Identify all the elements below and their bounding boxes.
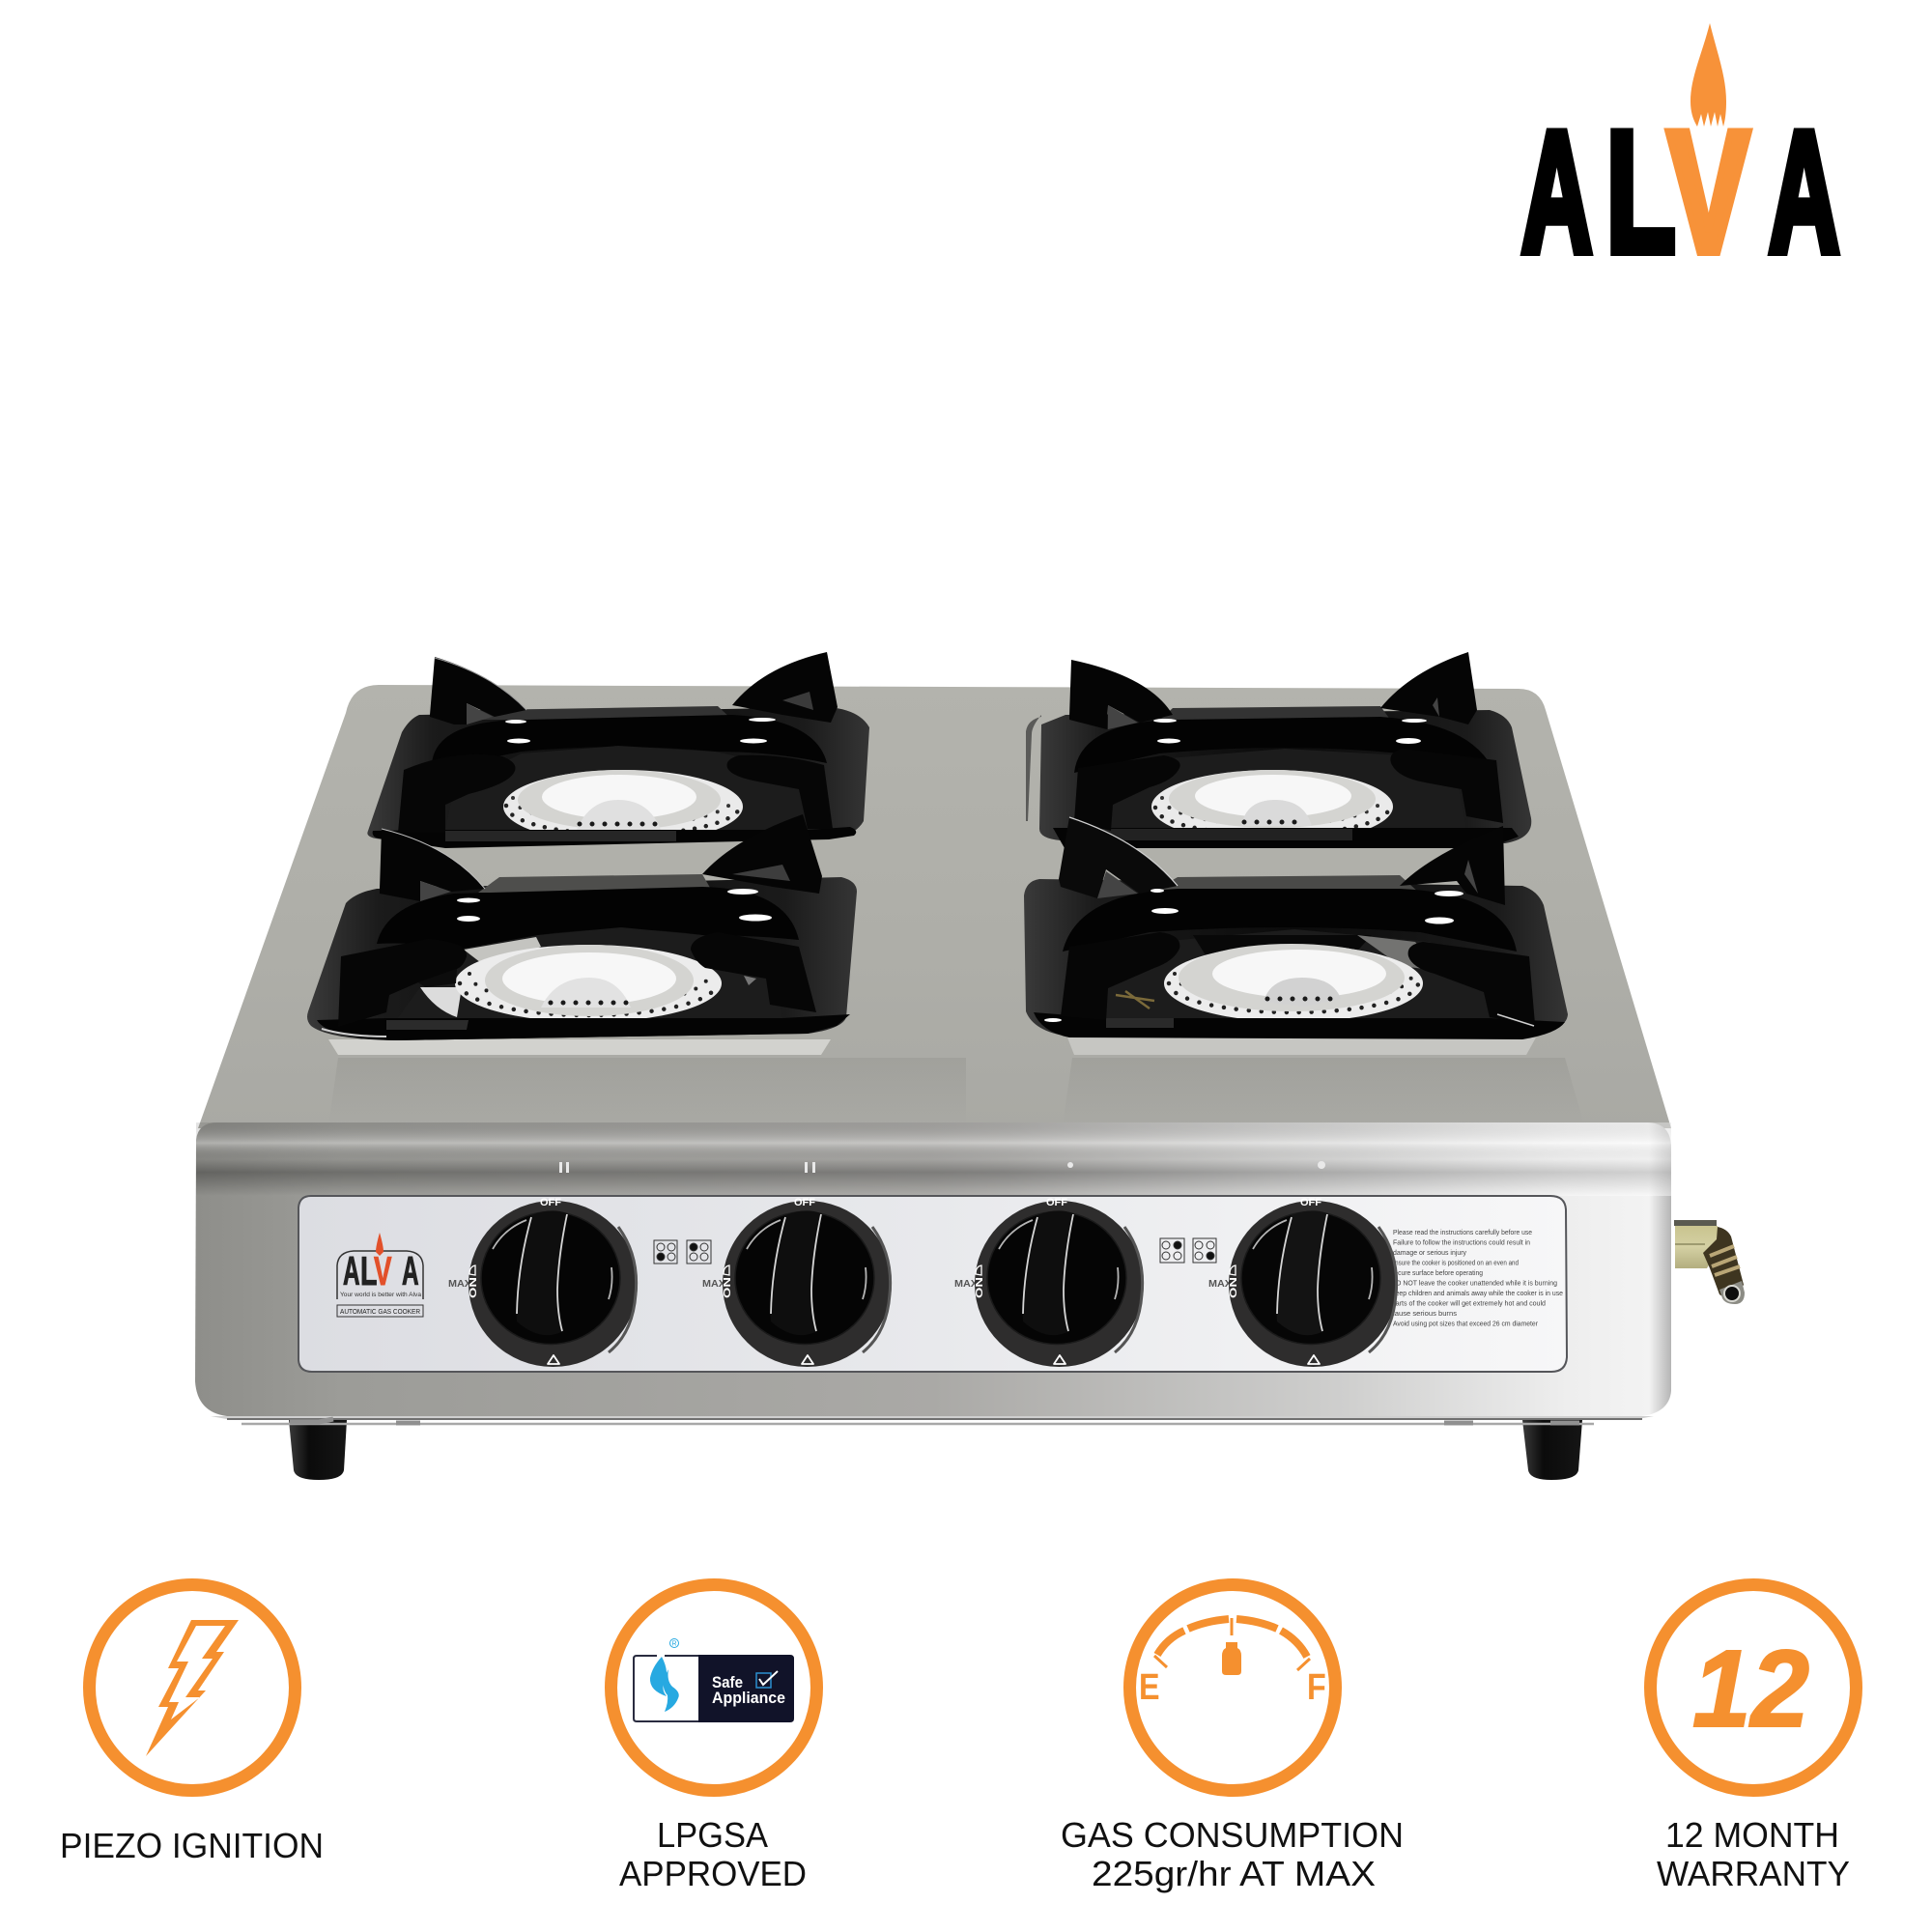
label: piezo ignition: PIEZO IGNITION — [60, 1826, 324, 1865]
logo wordmark: A — [1521, 96, 1592, 288]
knob 3: ON — [975, 1277, 985, 1298]
logo: ALVA — [1521, 23, 1839, 288]
feature: gas consumption — [1061, 1584, 1407, 1893]
knob 3: OFF — [1046, 1197, 1067, 1208]
instruction text — [1391, 1228, 1563, 1327]
icon: safe appliance badge in circle: R — [671, 1640, 677, 1648]
gas inlet fitting — [1674, 1220, 1745, 1304]
knob 1 — [448, 1197, 638, 1367]
chrome lower strip — [211, 1416, 1654, 1424]
panel logo: V — [374, 1248, 392, 1293]
knob 2: OFF — [794, 1197, 815, 1208]
knob 4: OFF — [1300, 1197, 1321, 1208]
label: gas consumption: GAS CONSUMPTION — [1061, 1815, 1404, 1855]
icon: 12 in circle — [1650, 1584, 1857, 1791]
knob 4: ON — [1229, 1277, 1239, 1298]
instruction text: DO NOT leave the cooker unattended while it is burning — [1391, 1279, 1557, 1287]
burner: front right — [1024, 817, 1568, 1039]
panel logo: AUTOMATIC GAS COOKER — [340, 1307, 421, 1316]
product: four burner gas cooker — [195, 652, 1745, 1480]
front face — [195, 1122, 1671, 1416]
panel logo — [337, 1233, 423, 1317]
instruction text: Failure to follow the instructions could result in — [1393, 1238, 1530, 1246]
instruction text: Parts of the cooker will get extremely hot and could — [1391, 1298, 1546, 1308]
icon: safe appliance badge in circle: Safe — [712, 1673, 743, 1691]
knob 2: MAX — [702, 1279, 725, 1290]
logo wordmark: A — [1769, 96, 1839, 288]
control panel — [298, 1196, 1567, 1372]
knob 1: MAX — [448, 1279, 471, 1290]
burner: rear left — [367, 652, 869, 848]
cooker feet — [289, 1420, 1582, 1480]
burner: rear right — [1026, 652, 1531, 848]
label: LPGSA approved: APPROVED — [619, 1854, 807, 1893]
knob 3: MAX — [954, 1279, 978, 1290]
instruction text: Ensure the cooker is positioned on an even and — [1391, 1258, 1519, 1267]
label: warranty: 12 MONTH — [1665, 1815, 1839, 1855]
label: LPGSA approved: LPGSA — [657, 1815, 768, 1855]
knob 2 — [702, 1197, 892, 1367]
panel logo: A — [343, 1249, 360, 1294]
icon: 12 in circle: 12 — [1692, 1628, 1809, 1749]
knob 2: ON — [723, 1277, 733, 1298]
burner: front left — [307, 814, 857, 1040]
knob 4 — [1208, 1197, 1398, 1367]
burner selector icons — [654, 1238, 1216, 1264]
label: gas consumption: 225gr/hr AT MAX — [1092, 1854, 1376, 1893]
instruction text: damage or serious injury — [1393, 1248, 1466, 1257]
feature: warranty — [1650, 1584, 1857, 1893]
instruction text: cause serious burns — [1391, 1309, 1457, 1318]
logo flame — [1690, 23, 1726, 127]
panel logo: Your world is better with Alva — [340, 1292, 421, 1298]
icon: lightning bolt in circle — [89, 1584, 296, 1791]
logo wordmark: L — [1606, 95, 1675, 288]
instruction text: Keep children and animals away while the cooker is in use — [1391, 1289, 1563, 1297]
panel logo: A — [402, 1249, 419, 1294]
label: warranty: WARRANTY — [1657, 1854, 1850, 1893]
cooktop surface — [198, 685, 1671, 1128]
knob 1: ON — [469, 1277, 479, 1298]
knob 3 — [954, 1197, 1144, 1367]
instruction text: Please read the instructions carefully before use — [1393, 1228, 1532, 1236]
panel logo: L — [360, 1247, 377, 1293]
knob 4: MAX — [1208, 1279, 1232, 1290]
icon: gas gauge in circle: F — [1307, 1667, 1326, 1708]
feature: piezo ignition — [60, 1584, 324, 1865]
instruction text: Avoid using pot sizes that exceed 26 cm diameter — [1393, 1320, 1538, 1327]
icon: gas gauge in circle — [1130, 1584, 1335, 1791]
knob 1: OFF — [540, 1197, 561, 1208]
icon: gas gauge in circle: E — [1139, 1667, 1160, 1708]
instruction text: secure surface before operating — [1391, 1268, 1483, 1277]
icon: safe appliance badge in circle — [611, 1584, 817, 1791]
icon: safe appliance badge in circle: Appliance — [712, 1689, 785, 1707]
logo wordmark — [1521, 95, 1839, 288]
logo wordmark: V — [1667, 96, 1749, 288]
feature: LPGSA approved — [611, 1584, 817, 1893]
